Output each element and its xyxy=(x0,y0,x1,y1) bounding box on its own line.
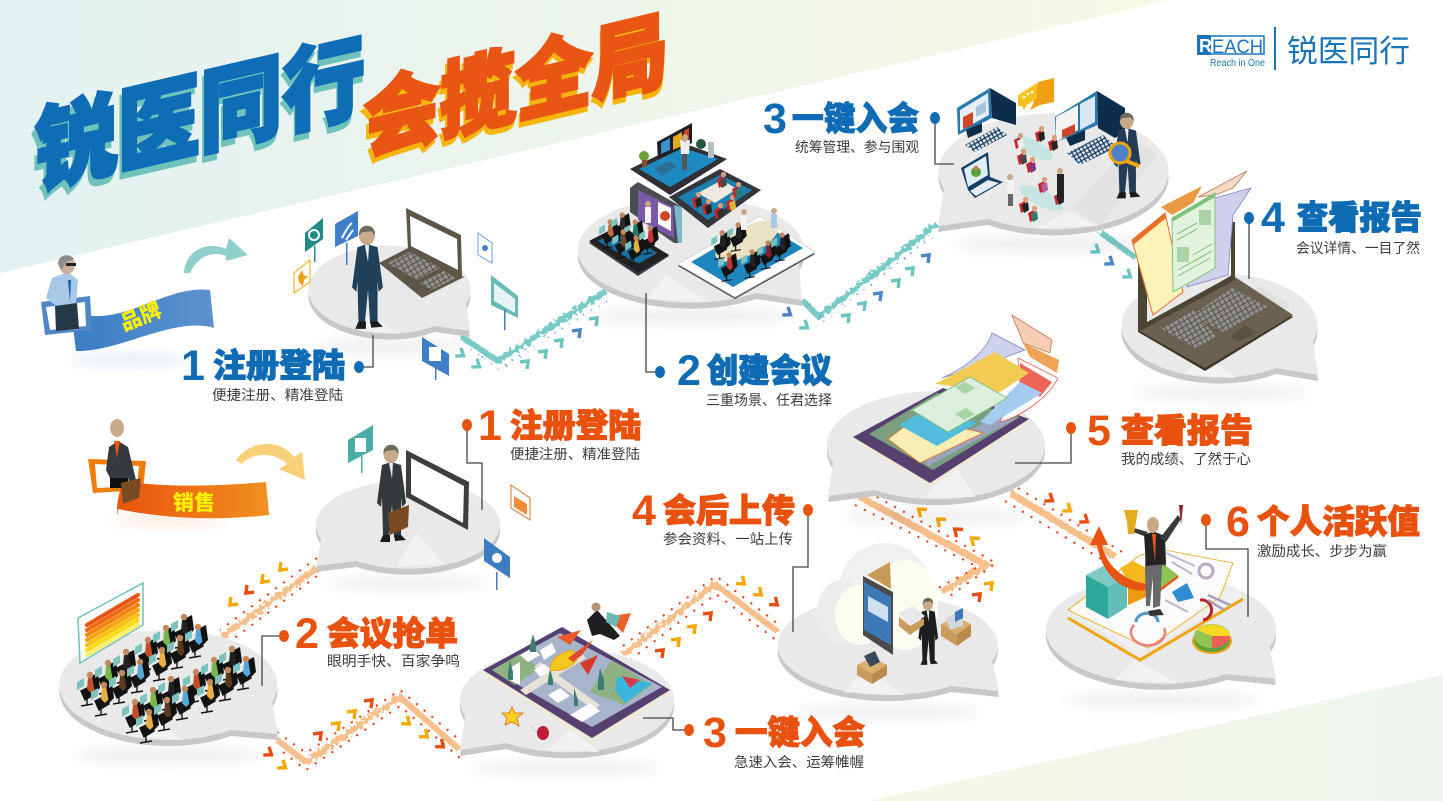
callout: sales 5 查看报告: 查看报告 xyxy=(1121,404,1253,452)
callout: sales 6 个人活跃值: 6 xyxy=(1226,498,1250,546)
callout: sales 3 一键入会: 3 xyxy=(703,709,727,757)
document with charts xyxy=(1068,550,1243,660)
frame xyxy=(41,296,92,335)
meeting tables xyxy=(1007,126,1066,222)
tablet xyxy=(406,450,469,530)
icon: star card xyxy=(294,260,310,293)
person xyxy=(46,255,79,331)
callout: brand 1 注册登陆: 注册登陆 xyxy=(213,339,345,387)
callout: sales 5 查看报告: 我的成绩、了然于心 xyxy=(1121,449,1251,469)
background band: bottom xyxy=(868,675,1443,801)
callout: sales 2 会议抢单: 2 xyxy=(295,610,319,658)
frame xyxy=(88,459,146,493)
callout: brand 1 注册登陆: 便捷注册、精准登陆 xyxy=(212,385,343,405)
icon: rocket xyxy=(550,630,598,675)
icon: thumb sign xyxy=(422,337,449,380)
callout: brand 3 一键入会 xyxy=(763,92,954,164)
panel: brand step 4 bubble xyxy=(1121,171,1318,401)
panel: sales step 3 bubble xyxy=(460,602,674,776)
phone xyxy=(863,562,893,655)
callout: brand 4 查看报告: 4 xyxy=(1261,194,1285,242)
panel: sales step 6 bubble xyxy=(1046,505,1276,708)
laptop xyxy=(1138,222,1293,371)
logo: 锐医同行 xyxy=(1287,26,1410,71)
bars xyxy=(1086,561,1178,619)
arrow: teal curved xyxy=(184,238,248,273)
callout: sales 6 个人活跃值 xyxy=(1201,495,1420,617)
tablet: white conference xyxy=(678,208,815,299)
banner: 品牌 xyxy=(72,289,214,351)
tablet: presentation stage xyxy=(630,123,727,195)
callout: brand 2 创建会议 xyxy=(646,293,832,410)
person xyxy=(352,226,383,329)
panel: sales step 5 bubble xyxy=(827,315,1059,525)
callout: brand 4 查看报告 xyxy=(1244,191,1422,279)
panel: brand role figure xyxy=(41,238,248,367)
laptop xyxy=(379,208,464,298)
icon: doc xyxy=(478,233,492,263)
icon: star xyxy=(502,707,523,726)
callout: sales 5 查看报告: 5 xyxy=(1087,407,1111,455)
person with magnifier xyxy=(1114,113,1141,198)
callout: brand 3 一键入会: 3 xyxy=(763,95,787,143)
cloud xyxy=(817,543,938,650)
computer: left xyxy=(957,88,1016,152)
person with briefcase xyxy=(377,445,406,542)
callout: brand 2 创建会议: 创建会议 xyxy=(707,344,832,392)
callout: sales 2 会议抢单: 会议抢单 xyxy=(327,607,458,655)
computer: right xyxy=(1055,91,1125,165)
icon: envelope sign xyxy=(491,275,518,330)
route: brand teal paths xyxy=(455,224,1136,371)
callout: sales 4 会后上传: 4 xyxy=(632,487,656,535)
icon: pin xyxy=(530,726,549,740)
icon: magnifier xyxy=(1110,143,1139,166)
tablet: meeting room xyxy=(669,169,761,228)
callout: sales 2 会议抢单: 眼明手快、百家争鸣 xyxy=(327,651,460,671)
arrow: orange rising xyxy=(1090,526,1150,591)
report pages xyxy=(1132,171,1251,315)
callout: sales 5 查看报告 xyxy=(1015,404,1253,469)
callout: brand 3 一键入会: 一键入会 xyxy=(792,92,919,140)
icon: image card xyxy=(511,485,530,520)
logo: R xyxy=(1199,36,1212,56)
callout: sales 4 会后上传 xyxy=(632,484,813,632)
callout: brand 1 注册登陆 xyxy=(181,335,373,405)
callout: brand 3 一键入会: 统筹管理、参与围观 xyxy=(795,137,919,157)
background band: top xyxy=(0,0,1170,273)
logo: Reach in One xyxy=(1210,58,1265,69)
title: 锐医同行: 锐医同行 xyxy=(35,2,365,212)
panel: brand step 2 bubble xyxy=(578,123,815,325)
icon: thumb sign xyxy=(348,425,373,473)
callout: brand 4 查看报告: 会议详情、一目了然 xyxy=(1296,238,1420,258)
laptop: video call xyxy=(961,152,1003,198)
report pages xyxy=(888,315,1059,463)
callout: brand 4 查看报告: 查看报告 xyxy=(1297,191,1422,239)
icon: teal target sign xyxy=(305,218,323,262)
pie chart xyxy=(1192,624,1232,654)
icon: blue wifi sign xyxy=(335,211,358,265)
panel: sales step 1 bubble xyxy=(316,425,530,591)
callout: brand 1 注册登陆: 1 xyxy=(181,342,205,390)
screen: stripes xyxy=(78,583,143,663)
icon: boxes xyxy=(857,606,971,684)
callout: sales 6 个人活跃值: 激励成长、步步为赢 xyxy=(1257,541,1387,561)
banner: 销售: 销售 xyxy=(173,487,215,517)
person with trophy xyxy=(1124,505,1183,616)
icon: chat bubbles xyxy=(1018,78,1054,110)
callout: sales 1 注册登陆: 便捷注册、精准登陆 xyxy=(510,444,640,464)
panel: sales role figure xyxy=(88,419,305,526)
callout: sales 3 一键入会: 急速入会、运筹帷幄 xyxy=(734,752,864,772)
person with box xyxy=(918,598,938,665)
phone: audience xyxy=(589,212,669,276)
callout: brand 2 创建会议: 2 xyxy=(677,347,701,395)
person on laptop xyxy=(587,602,631,640)
callout: sales 4 会后上传: 会后上传 xyxy=(663,484,795,532)
callout: sales 6 个人活跃值: 个人活跃值 xyxy=(1257,495,1420,543)
callout: sales 1 注册登陆 xyxy=(462,399,641,510)
arrow: pale orange curved xyxy=(236,444,305,480)
panel: brand step 3 bubble xyxy=(938,78,1169,253)
phone: purple screen xyxy=(630,182,682,243)
panel: sales step 2 bubble xyxy=(59,583,278,764)
callout: sales 4 会后上传: 参会资料、一站上传 xyxy=(663,529,793,549)
callout: sales 3 一键入会: 一键入会 xyxy=(735,706,865,754)
callout: sales 1 注册登陆: 1 xyxy=(478,402,502,450)
tablet xyxy=(853,388,1029,487)
banner: 销售 xyxy=(117,481,269,518)
person xyxy=(106,419,141,504)
callout: brand 2 创建会议: 三重场景、任君选择 xyxy=(706,390,832,410)
tablet: city map xyxy=(483,627,670,743)
callout: sales 3 一键入会 xyxy=(643,706,865,772)
banner: 品牌: 品牌 xyxy=(115,294,166,337)
callout: sales 1 注册登陆: 注册登陆 xyxy=(510,399,641,447)
route: sales orange paths xyxy=(220,488,1122,772)
icon: briefcase xyxy=(388,505,409,535)
panel: brand step 1 bubble xyxy=(294,208,518,380)
panel: sales step 4 bubble xyxy=(778,543,999,720)
title: 锐医同行: 锐医同行 xyxy=(32,9,364,219)
logo: EACH xyxy=(1212,37,1263,58)
callout: sales 2 会议抢单 xyxy=(262,607,460,686)
icon: heart sign xyxy=(484,538,510,590)
audience seats xyxy=(77,614,256,743)
logo xyxy=(1197,26,1410,71)
